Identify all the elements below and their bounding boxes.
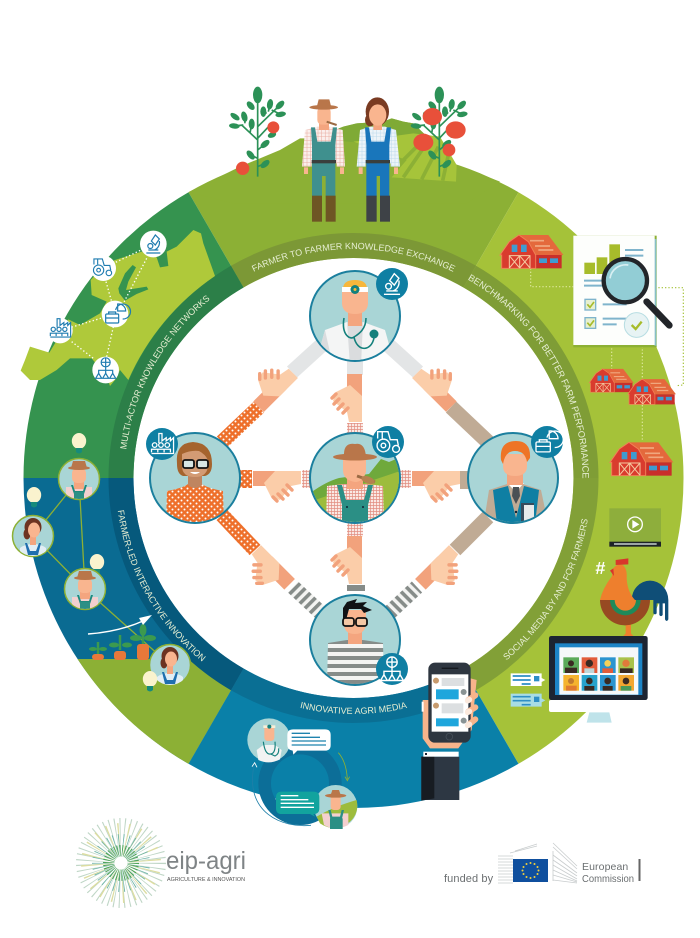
sleeve: left woman upper — [222, 407, 259, 442]
report document — [573, 236, 657, 347]
sleeve: businessman lower — [455, 517, 488, 550]
barn 4 — [610, 442, 673, 476]
baltic sea — [118, 265, 148, 301]
sleeve: doctor right — [385, 342, 418, 372]
band: benchmarking — [464, 266, 598, 478]
person: businessman — [468, 426, 563, 528]
hashtag: # — [595, 558, 605, 578]
sleeve: stripes right — [388, 587, 417, 614]
cuffs on the cross arms — [238, 360, 470, 591]
social media scene — [511, 508, 668, 723]
farmer node left — [12, 516, 54, 557]
carrots — [89, 624, 156, 660]
europe map with actor network — [21, 230, 215, 386]
band: social media — [464, 478, 598, 690]
logo wordmark: eip-agri — [166, 847, 246, 875]
sleeve: stripes left — [293, 587, 322, 614]
commission building lines left — [498, 844, 537, 883]
band: farmer to farmer — [231, 233, 476, 288]
commission building lines right — [553, 843, 577, 883]
striped field — [353, 133, 457, 182]
female farmer — [357, 97, 400, 222]
factory node — [47, 318, 73, 343]
dotted loop right of report — [655, 288, 683, 386]
desktop monitor — [549, 636, 648, 723]
barn 2 — [589, 369, 634, 392]
handshake: bottom right — [415, 545, 470, 600]
funded by european commission — [444, 843, 640, 885]
label: benchmarking: BENCHMARKING FOR BETTER FARM PERFORMANCE — [468, 274, 589, 478]
logo tagline: AGRICULTURE & INNOVATION — [167, 877, 245, 883]
cycle arrows — [252, 753, 350, 826]
tomato plant right — [410, 87, 468, 177]
speech bubble white — [511, 673, 545, 686]
sector: lower green field — [78, 659, 231, 764]
badge: briefcase and chart — [531, 426, 563, 458]
rooster — [600, 558, 668, 636]
sector: innovative agri media — [188, 668, 518, 808]
person: central farmer — [309, 426, 404, 528]
separator bar — [638, 859, 640, 881]
bulb middle — [90, 554, 104, 574]
sector: farmer to farmer — [188, 148, 518, 288]
sector: benchmarking and social media — [464, 192, 684, 764]
badge: tractor — [372, 426, 404, 458]
cycle ring — [265, 748, 335, 819]
arc label paths and text — [118, 242, 589, 714]
dotted links on field — [531, 268, 642, 442]
benchmarking scene — [500, 235, 683, 476]
sleeve: left woman lower — [222, 515, 255, 550]
sleeve: doctor to advisor-left — [292, 342, 325, 372]
magnifying glass — [604, 259, 669, 325]
farmer node top — [58, 458, 100, 501]
sector: farmer-led innovation — [23, 478, 243, 764]
network node — [92, 357, 119, 383]
eip-agri logo — [94, 836, 246, 890]
EU flag — [513, 859, 548, 882]
bulb left — [27, 487, 41, 508]
handshake: top vertical — [332, 374, 362, 422]
band: farmer-led — [108, 478, 244, 690]
badge: factory — [146, 428, 178, 460]
farmer node bottom — [150, 644, 190, 686]
handshake: right horizontal — [412, 471, 460, 501]
badge: globe network — [376, 653, 408, 685]
tomato plant left — [229, 87, 286, 177]
farmer-led innovation network — [12, 433, 190, 692]
handshake: bottom vertical — [332, 536, 362, 584]
commission text: Commission — [582, 873, 634, 885]
innovative agri media scene — [247, 663, 477, 829]
handshake: left horizontal — [253, 471, 301, 501]
briefcase node — [102, 301, 131, 327]
farmer node middle — [64, 568, 106, 611]
label: innovative agri media: INNOVATIVE AGRI MEDIA — [300, 702, 408, 714]
person: young man with striped shirt — [310, 595, 408, 686]
speech bubble blue — [511, 694, 545, 707]
hand holding smartphone — [421, 663, 477, 801]
badge: microscope — [376, 268, 408, 300]
label: multi-actor: MULTI-ACTOR KNOWLEDGE NETWORKS — [120, 296, 210, 449]
video player — [609, 508, 661, 547]
network lines — [60, 244, 153, 358]
label: farmer to farmer: FARMER TO FARMER KNOWLEDGE EXCHANGE — [252, 242, 456, 272]
handshake: top left — [243, 357, 298, 412]
farmer avatar — [314, 785, 357, 829]
person: doctor — [310, 268, 408, 366]
barn 1 — [500, 235, 563, 268]
field furrows — [397, 138, 448, 181]
handshake: top right — [412, 357, 467, 412]
hill silhouette — [189, 118, 500, 203]
bulb top — [72, 433, 86, 454]
sector: multi-actor — [24, 192, 244, 478]
logo starburst — [94, 836, 148, 890]
sleeve: businessman upper — [451, 407, 488, 442]
band: multi-actor — [108, 266, 244, 478]
microscope node — [140, 231, 167, 257]
person: woman researcher — [146, 428, 240, 524]
funded by text: funded by — [444, 873, 494, 885]
label: social media: SOCIAL MEDIA BY AND FOR FARMERS — [504, 518, 588, 660]
label: farmer-led innovation: FARMER-LED INTERACTIVE INNOVATION — [118, 510, 206, 662]
male farmer — [302, 99, 345, 222]
bulb bottom — [143, 671, 157, 692]
barn 3 — [628, 379, 676, 404]
handshake: bottom left — [240, 545, 295, 600]
hill scene with farmers and tomato plants — [189, 87, 500, 222]
upper hill — [313, 118, 457, 165]
circular ring with six sectors — [23, 148, 684, 808]
connecting lines — [33, 479, 170, 665]
doctor speech bubble — [287, 729, 331, 755]
inner circle with connected actors — [146, 268, 563, 686]
band: innovative agri media — [231, 668, 476, 723]
white arrow — [88, 615, 152, 634]
map landmass — [21, 230, 215, 386]
tractor node — [91, 256, 116, 281]
doctor avatar — [247, 718, 291, 762]
farmer speech bubble — [276, 792, 319, 817]
european text: European — [582, 861, 628, 873]
